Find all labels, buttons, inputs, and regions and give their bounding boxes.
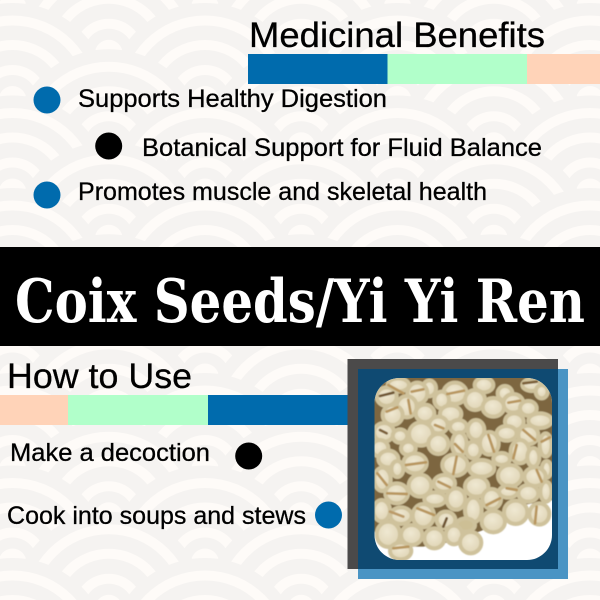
colour bar: top: [248, 54, 600, 84]
bullet: decoction: Make a decoction: [10, 439, 210, 467]
photo frame: [348, 359, 568, 579]
bullet: soups and stews: Cook into soups and stews: [7, 502, 306, 530]
panel: medicinal benefits: [34, 16, 600, 208]
photo: coix seeds: [372, 377, 553, 561]
heading: medicinal benefits: Medicinal Benefits: [249, 16, 545, 55]
colour bar: lower: [0, 395, 348, 425]
bullet: fluid balance: Botanical Support for Fluid Balance: [142, 134, 542, 162]
bullet: muscle and skeletal: Promotes muscle and skeletal health: [78, 178, 487, 206]
heading: how to use: How to Use: [7, 357, 192, 396]
title band: [0, 247, 600, 346]
bullet: digestion: Supports Healthy Digestion: [78, 85, 387, 113]
panel: how to use: [0, 357, 348, 530]
